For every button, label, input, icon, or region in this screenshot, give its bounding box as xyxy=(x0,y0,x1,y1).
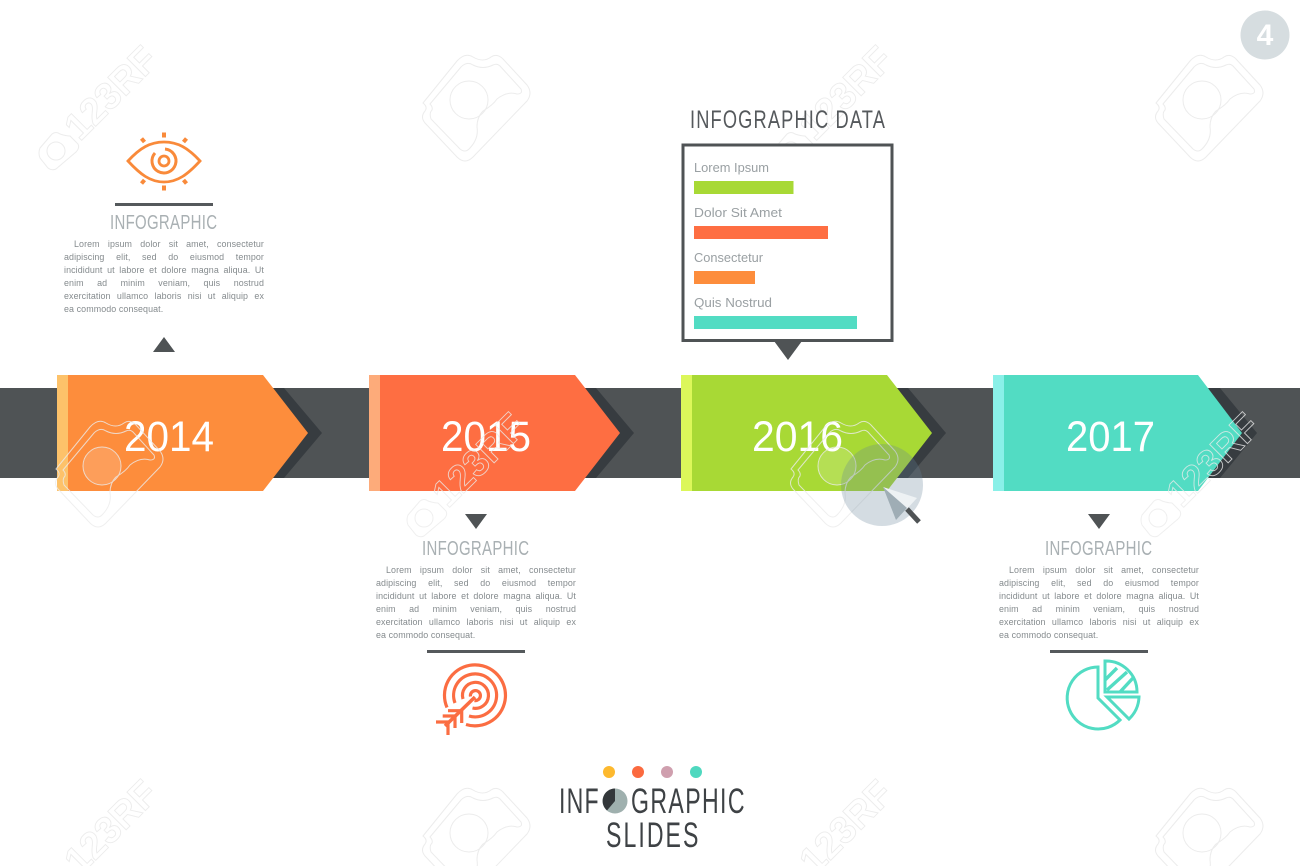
watermark: background marks: 123RF xyxy=(57,39,166,148)
bar: quis nostrud xyxy=(694,295,857,329)
arrow: 2017 xyxy=(993,375,1257,491)
text block: 2014: incididunt ut labore et dolore magna aliqua. Ut xyxy=(64,265,264,275)
text block: 2014: enim ad minim veniam, quis nostrud xyxy=(64,278,264,288)
icon: target with arrow xyxy=(436,665,505,735)
text block: 2017: enim ad minim veniam, quis nostrud xyxy=(999,604,1199,614)
text block: 2015: Lorem ipsum dolor sit amet, consectetur xyxy=(386,565,576,575)
text block: 2015: adipiscing elit, sed do eiusmod tempor xyxy=(376,578,576,588)
text block: 2017: incididunt ut labore et dolore magna aliqua. Ut xyxy=(999,591,1199,601)
arrow: 2017: 2017 xyxy=(1066,413,1155,461)
footer title: SLIDES xyxy=(606,816,698,855)
text block: 2014: Lorem ipsum dolor sit amet, consectetur xyxy=(74,239,264,249)
triangle: 2015 pointer xyxy=(465,514,487,529)
heading: infographic data: INFOGRAPHIC DATA xyxy=(690,105,885,134)
footer title xyxy=(559,782,745,855)
watermark: marks over the timeline xyxy=(56,406,1268,537)
footer title: INF xyxy=(559,782,599,821)
text block: 2017: adipiscing elit, sed do eiusmod tempor xyxy=(999,578,1199,588)
watermark: marks over the timeline: 123RF xyxy=(425,406,534,515)
bar: consectetur: Consectetur xyxy=(694,250,764,265)
timeline band xyxy=(0,388,1300,478)
arrow: 2015 xyxy=(369,375,634,491)
arrow: 2016: 2016 xyxy=(752,413,843,461)
text block: 2015: exercitation ullamco laboris nisi ut aliquip ex xyxy=(376,617,576,627)
arrow: 2015: 2015 xyxy=(441,413,531,461)
icon: pie chart xyxy=(1067,661,1139,729)
text block: 2015 xyxy=(376,565,576,640)
bar: dolor sit amet xyxy=(694,205,828,239)
heading: 2017 infographic: INFOGRAPHIC xyxy=(1045,537,1152,560)
watermark: background marks: 123RF xyxy=(792,39,901,148)
text block: 2014: exercitation ullamco laboris nisi ut aliquip ex xyxy=(64,291,264,301)
arrow: 2014 xyxy=(57,375,322,491)
panel: data card with bar chart xyxy=(683,145,892,360)
bar: consectetur xyxy=(694,250,764,284)
arrow: 2016 xyxy=(681,375,946,491)
divider: 2015 xyxy=(427,650,525,653)
cursor highlight xyxy=(841,444,923,526)
triangle: up pointer xyxy=(153,337,175,352)
text block: 2017: ea commodo consequat. xyxy=(999,630,1098,640)
heading: 2015 infographic: INFOGRAPHIC xyxy=(422,537,529,560)
text block: 2014: adipiscing elit, sed do eiusmod tempor xyxy=(64,252,264,262)
page number badge xyxy=(1240,10,1290,60)
divider: 2014 xyxy=(115,203,213,206)
triangle: 2017 pointer xyxy=(1088,514,1110,529)
text block: 2017 xyxy=(999,565,1199,640)
text block: 2014: ea commodo consequat. xyxy=(64,304,163,314)
text block: 2015: ea commodo consequat. xyxy=(376,630,475,640)
text block: 2017: exercitation ullamco laboris nisi ut aliquip ex xyxy=(999,617,1199,627)
icon: eye xyxy=(128,132,200,190)
bar: dolor sit amet: Dolor Sit Amet xyxy=(694,205,782,220)
divider: 2017 xyxy=(1050,650,1148,653)
bar: lorem ipsum xyxy=(694,160,794,194)
text block: 2014 xyxy=(64,239,264,314)
text block: 2015: incididunt ut labore et dolore magna aliqua. Ut xyxy=(376,591,576,601)
bar: lorem ipsum: Lorem Ipsum xyxy=(694,160,769,175)
bar: quis nostrud: Quis Nostrud xyxy=(694,295,772,310)
watermark: marks over the timeline: 123RF xyxy=(1159,406,1268,515)
heading: 2014 infographic: INFOGRAPHIC xyxy=(110,211,217,234)
text block: 2015: enim ad minim veniam, quis nostrud xyxy=(376,604,576,614)
text block: 2017: Lorem ipsum dolor sit amet, consectetur xyxy=(1009,565,1199,575)
page number badge: 4 xyxy=(1257,19,1274,52)
arrow: 2014: 2014 xyxy=(124,413,214,461)
footer title: GRAPHIC xyxy=(631,782,745,821)
legend dots xyxy=(603,766,702,778)
